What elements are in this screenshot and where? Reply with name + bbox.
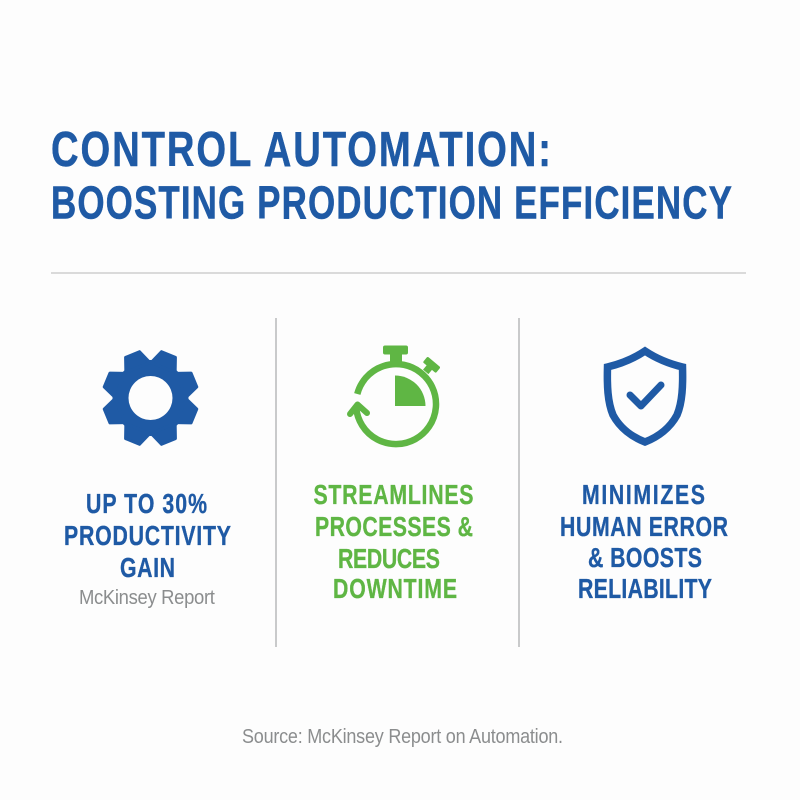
panel: reliability [560, 351, 728, 605]
stat text: productivity gain: GAIN [120, 552, 175, 584]
source note: Source: McKinsey Report on Automation. [242, 726, 563, 748]
caption: McKinsey Report: McKinsey Report [79, 586, 215, 609]
text: minimizes human error: HUMAN ERROR [560, 511, 728, 543]
stat text: productivity gain [64, 488, 231, 584]
panel: streamlines [314, 346, 473, 605]
title: CONTROL AUTOMATION: [51, 123, 551, 177]
text: minimizes human error [560, 479, 728, 605]
text: streamlines processes: DOWNTIME [333, 573, 457, 605]
text: minimizes human error: & BOOSTS [588, 542, 702, 574]
text: minimizes human error: MINIMIZES [582, 479, 705, 511]
text: minimizes human error: RELIABILITY [578, 573, 712, 605]
icon: gear [102, 350, 199, 446]
icon: stopwatch [350, 346, 441, 444]
title [51, 123, 732, 229]
title: BOOSTING PRODUCTION EFFICIENCY [51, 177, 732, 229]
stat text: productivity gain: UP TO 30% [86, 488, 207, 520]
text: streamlines processes [314, 479, 473, 605]
icon: shield check [607, 351, 683, 442]
text: streamlines processes: STREAMLINES [314, 479, 473, 511]
text: streamlines processes: REDUCES [338, 543, 440, 575]
text: streamlines processes: PROCESSES & [315, 511, 473, 543]
panel: productivity [64, 350, 231, 609]
stat text: productivity gain: PRODUCTIVITY [64, 520, 231, 552]
